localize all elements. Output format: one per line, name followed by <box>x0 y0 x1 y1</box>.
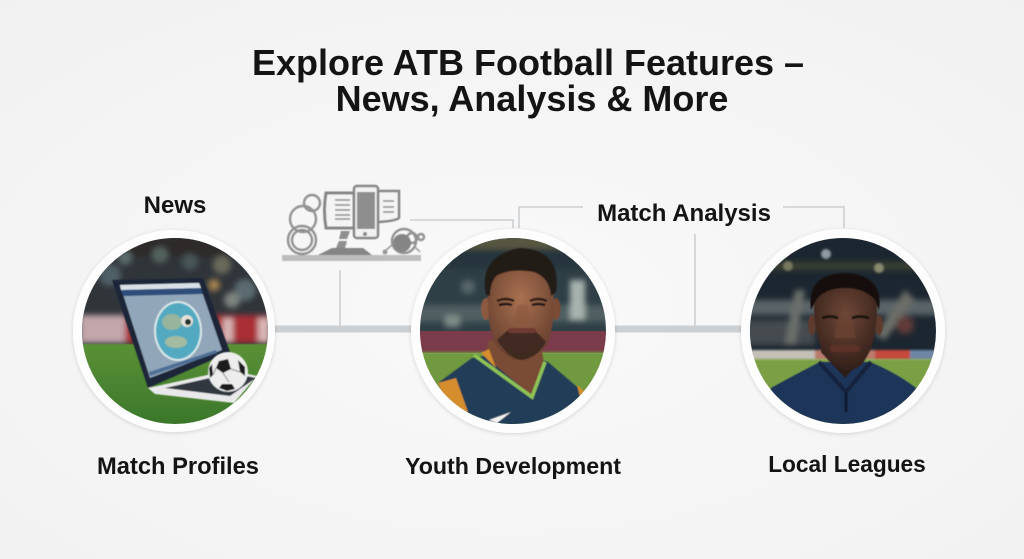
jacket <box>770 361 916 424</box>
label: Youth Development: Youth Development <box>405 453 621 479</box>
label: Local Leagues: Local Leagues <box>768 451 926 477</box>
label: News: News <box>144 192 206 219</box>
head <box>481 298 491 320</box>
photo panel: senior player <box>741 229 945 434</box>
photo panel: laptop and ball <box>73 230 275 434</box>
hair <box>485 248 557 296</box>
connector lines <box>270 207 844 329</box>
title: Explore ATB Football Features – <box>252 42 804 83</box>
label: Match Analysis: Match Analysis <box>597 200 771 227</box>
neck <box>484 340 544 396</box>
label: Match Profiles: Match Profiles <box>97 454 259 480</box>
soccer ball <box>208 352 248 392</box>
photo panel: youth player <box>411 229 615 433</box>
jersey <box>438 356 580 424</box>
title <box>252 42 804 119</box>
laptop <box>112 278 257 403</box>
face <box>808 315 816 335</box>
title: News, Analysis & More <box>336 78 728 119</box>
icon: devices and gears <box>282 186 424 261</box>
